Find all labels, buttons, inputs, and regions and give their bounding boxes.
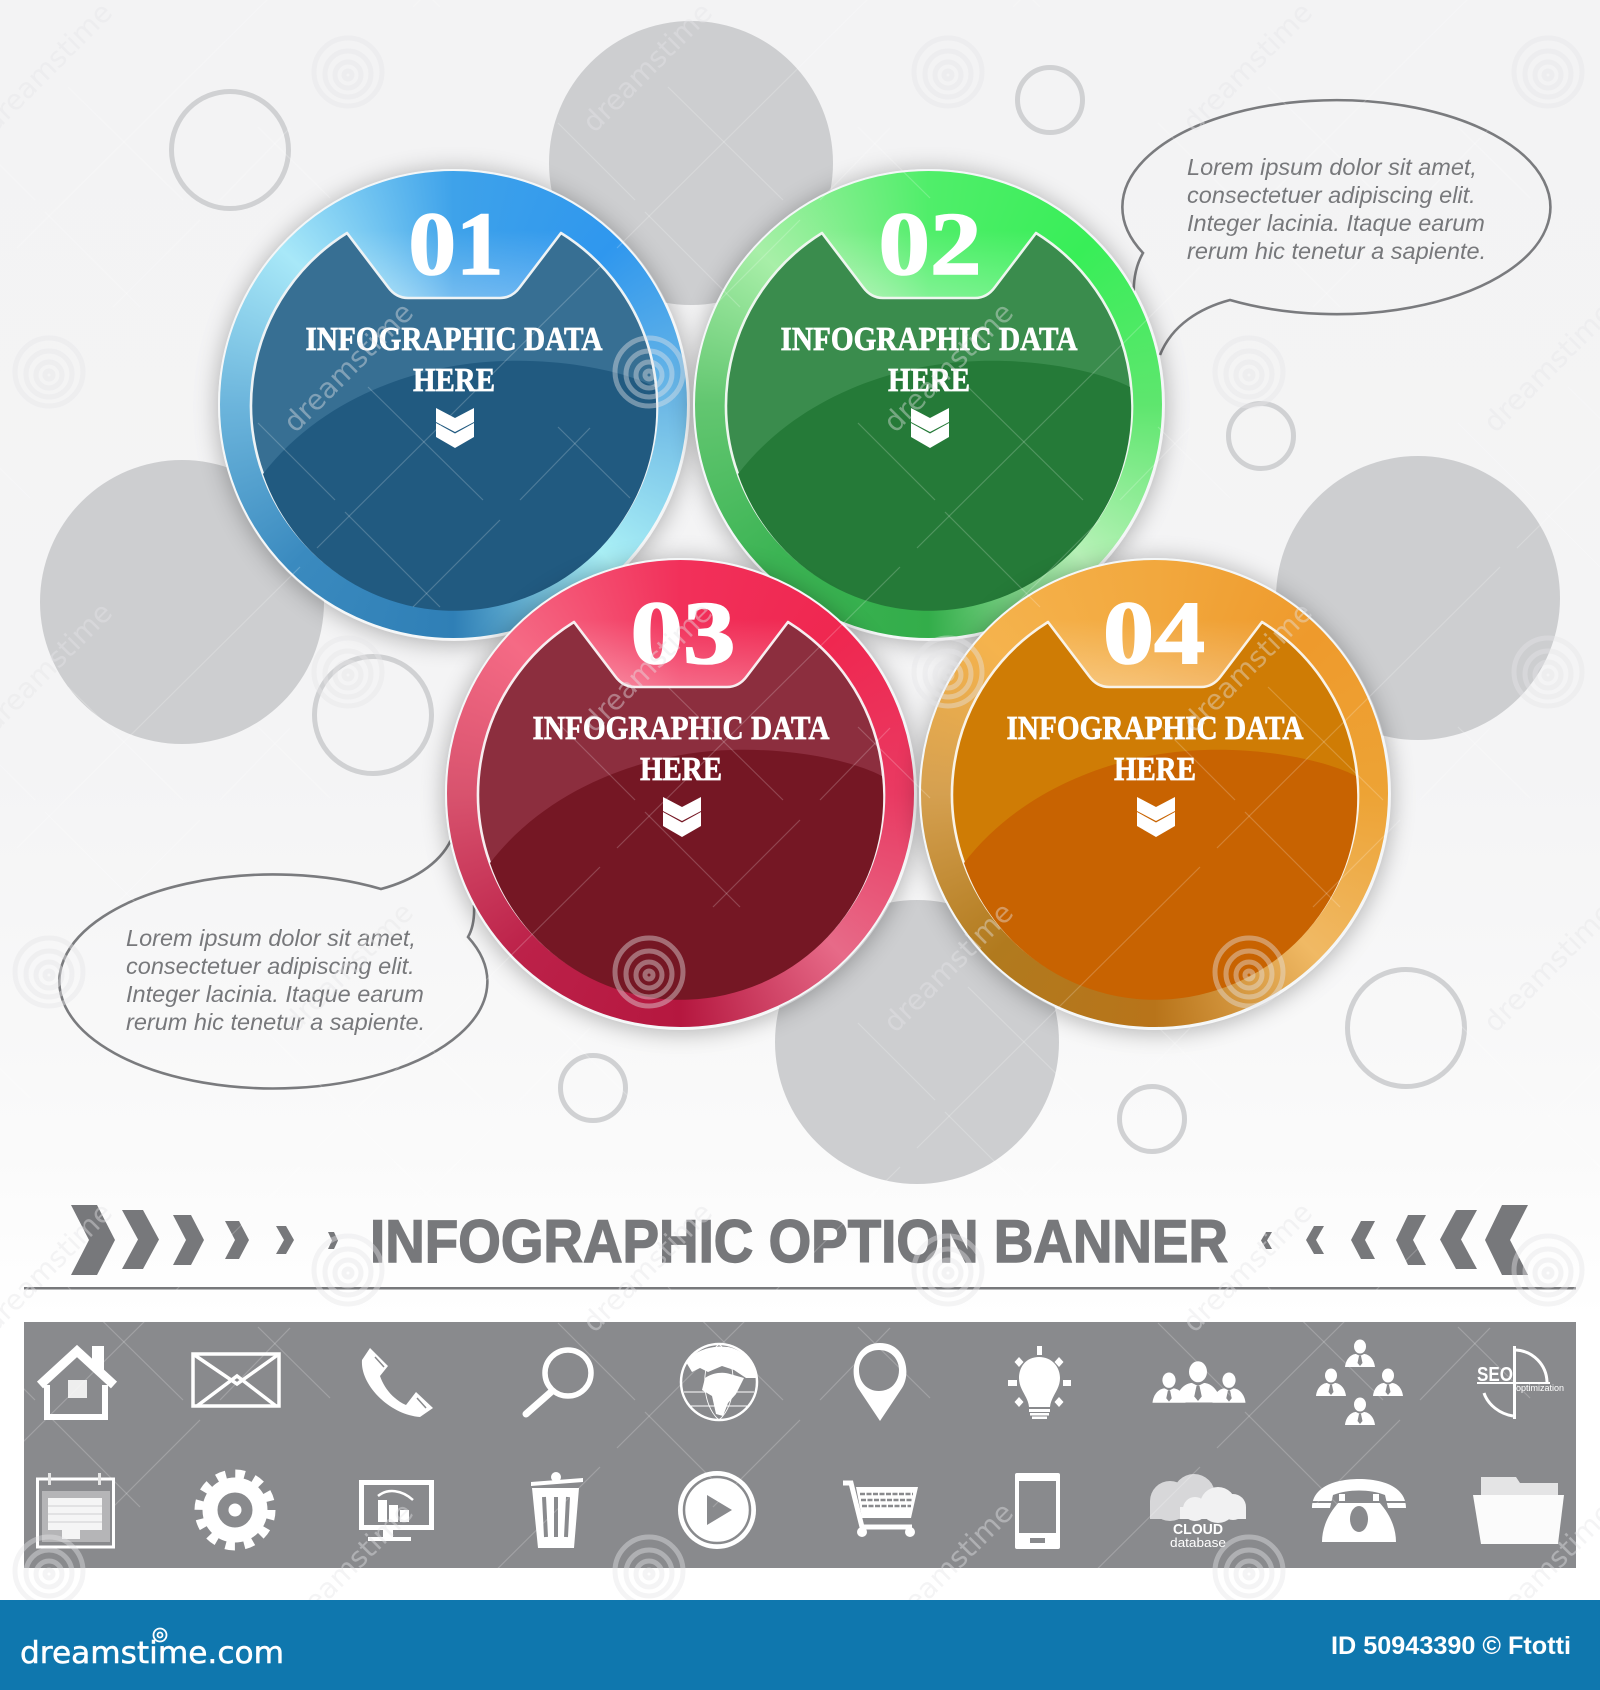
inner disc with notch (478, 622, 884, 998)
icon: SEO optimization: optimization (1516, 1383, 1564, 1393)
speech bubble: top right: Lorem ipsum dolor sit amet, (1187, 154, 1477, 180)
speech bubble: top right: rerum hic tenetur a sapiente. (1187, 238, 1486, 264)
panel: step 01 blue circle (218, 169, 690, 641)
icon: SEO optimization (1477, 1346, 1564, 1419)
watermark overlay: dreamstime (277, 1496, 420, 1639)
icon: house (40, 1346, 114, 1417)
watermark overlay: dreamstime (576, 1196, 719, 1339)
icon: monitor with chart (359, 1480, 434, 1541)
gloss shadow area (263, 361, 656, 611)
logo text: dreamstime.com (20, 1636, 284, 1671)
inner disc with notch (726, 233, 1132, 609)
icon: gear (199, 1474, 271, 1546)
icon: location pin (854, 1343, 906, 1421)
speech bubble: bottom left: rerum hic tenetur a sapiente. (126, 1009, 425, 1035)
gloss shadow area (964, 750, 1357, 1000)
number 02: 02 (878, 195, 982, 294)
icon: telephone (1312, 1479, 1406, 1542)
icon: folder (1473, 1477, 1564, 1544)
chevrons left of heading (71, 1205, 338, 1275)
speech bubble: top right: Integer lacinia. Itaque earum (1187, 210, 1485, 236)
gloss shadow area (490, 750, 883, 1000)
icon: globe (681, 1344, 757, 1420)
chevrons right of heading (1261, 1205, 1528, 1275)
heading: INFOGRAPHIC OPTION BANNER (370, 1208, 1228, 1275)
title second line: HERE (413, 362, 495, 399)
icon: shopping cart (843, 1483, 918, 1537)
speech bubble: bottom left: Integer lacinia. Itaque earum (126, 981, 424, 1007)
icon: play button (678, 1471, 756, 1549)
icon: SEO optimization: SEO (1477, 1364, 1513, 1386)
panel: step 03 red circle (445, 558, 917, 1030)
speech bubble: bottom left: Lorem ipsum dolor sit amet, (126, 925, 416, 951)
icon: team (1152, 1361, 1246, 1403)
title text: INFOGRAPHIC DATA (780, 321, 1078, 358)
icon: double chevron down (663, 797, 701, 837)
icon: cloud database: CLOUD (1173, 1521, 1223, 1538)
title text: INFOGRAPHIC DATA (532, 710, 830, 747)
title text: INFOGRAPHIC DATA (306, 321, 603, 358)
blue gradient ring (218, 169, 689, 640)
inner disc with notch (952, 622, 1358, 998)
icon: cloud database: database (1170, 1535, 1226, 1550)
icon: double chevron down (911, 408, 949, 448)
watermark overlay: dreamstime (1176, 596, 1319, 739)
number 03: 03 (630, 584, 736, 683)
watermark overlay: dreamstime (277, 296, 420, 439)
icon: mobile phone (1015, 1473, 1060, 1549)
watermark overlay: dreamstime (576, 0, 719, 139)
watermark overlay: dreamstime (877, 896, 1020, 1039)
title text: INFOGRAPHIC DATA (1006, 710, 1304, 747)
inner disc with notch (251, 233, 657, 609)
icon: double chevron down (1137, 797, 1175, 837)
gloss shadow area (738, 361, 1131, 611)
title second line: HERE (640, 751, 722, 788)
watermark overlay: dreamstime (576, 596, 719, 739)
green gradient ring (693, 169, 1164, 640)
watermark overlay: dreamstime (877, 1496, 1020, 1639)
watermark overlay: dreamstime (277, 896, 420, 1039)
orange gradient ring (919, 558, 1390, 1029)
icon: light bulb (1008, 1346, 1071, 1419)
title second line: HERE (1114, 751, 1196, 788)
panel: step 04 orange circle (919, 558, 1391, 1030)
red gradient ring (445, 558, 916, 1029)
panel: step 02 green circle (693, 169, 1165, 641)
number 01: 01 (408, 195, 504, 294)
watermark overlay: dreamstime (1176, 0, 1319, 139)
icon: trash can (531, 1472, 583, 1548)
icon: network of people (1316, 1340, 1403, 1425)
watermark overlay: dreamstime (877, 296, 1020, 439)
speech bubble: bottom left: consectetuer adipiscing elit. (126, 953, 415, 979)
number 04: 04 (1103, 584, 1205, 683)
watermark overlay: dreamstime (1176, 1196, 1319, 1339)
icon: envelope (193, 1354, 279, 1406)
image id credit: ID 50943390 © Ftotti (1331, 1632, 1571, 1660)
logo spiral (154, 1628, 166, 1642)
icon: magnifier (526, 1350, 591, 1414)
icon: cloud database (1150, 1474, 1246, 1550)
title second line: HERE (888, 362, 970, 399)
icon panel (24, 1322, 1576, 1568)
icon: double chevron down (436, 408, 474, 448)
icon: calendar (38, 1473, 114, 1547)
icon: phone handset (362, 1348, 433, 1417)
speech bubble: top right: consectetuer adipiscing elit. (1187, 182, 1476, 208)
